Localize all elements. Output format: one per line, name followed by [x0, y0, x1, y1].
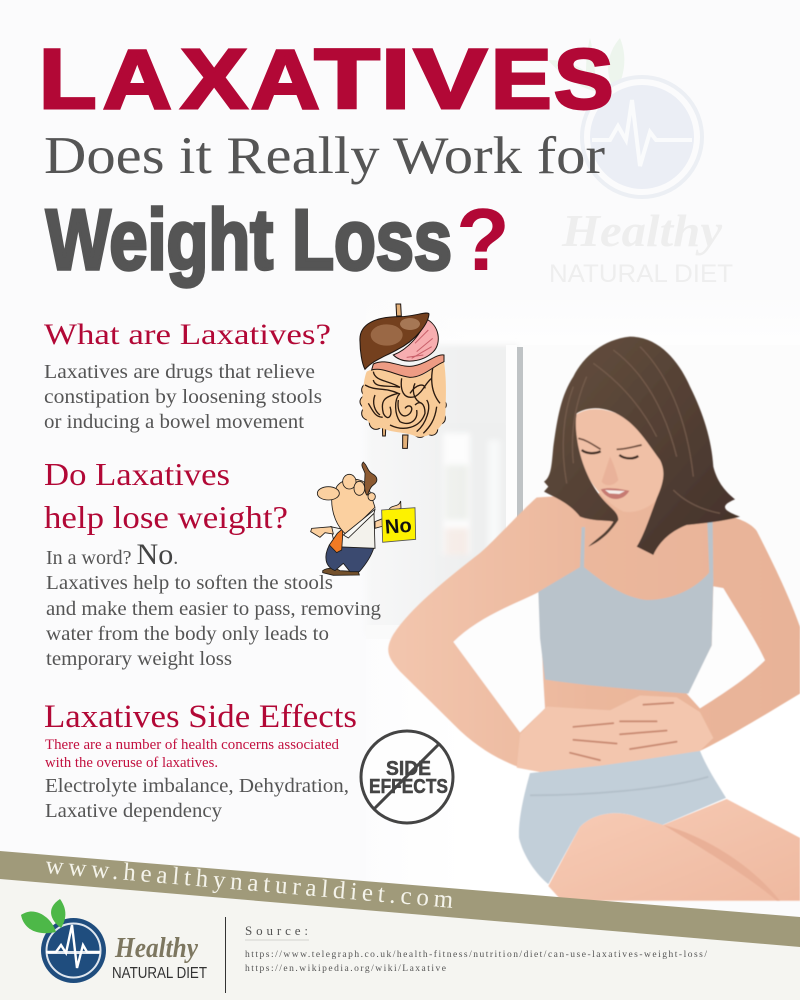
section: side effects: Laxatives Side Effects [44, 699, 357, 735]
section: do laxatives help: In a word? No. [46, 538, 178, 571]
icon: digestive system [360, 304, 446, 448]
face [573, 409, 668, 512]
section: what are laxatives: Laxatives are drugs that relieve [44, 361, 315, 383]
heading: question mark: ? [456, 190, 510, 289]
website url: www.healthynaturaldiet.com [44, 852, 455, 914]
footer logo [21, 899, 207, 983]
gap left of torso [453, 592, 545, 732]
thighs [548, 799, 800, 901]
title: Laxatives [39, 32, 613, 127]
title: Laxatives: V [414, 32, 487, 126]
source list: https://www.telegraph.co.uk/health-fitness/nutrition/diet/can-use-laxatives-weight-loss/ [245, 949, 707, 960]
section: do laxatives help: and make them easier to pass, removing [46, 598, 381, 620]
hands [517, 695, 713, 772]
skin: shoulders and arms [388, 486, 800, 771]
section: side effects: Electrolyte imbalance, Dehydration, [45, 775, 349, 797]
section: do laxatives help: temporary weight loss [46, 648, 232, 670]
footer background [0, 879, 800, 1000]
footer logo: Healthy [114, 932, 198, 964]
source list: Source: [245, 923, 308, 938]
icon: cartoon man with no sign: No [384, 515, 412, 539]
divider [224, 917, 226, 993]
icon: side effects crossed out: EFFECTS [369, 776, 448, 798]
shorts [519, 751, 726, 884]
icon: side effects crossed out [361, 731, 453, 823]
hair [544, 337, 740, 555]
source list: https://en.wikipedia.org/wiki/Laxative [245, 964, 446, 974]
icon: side effects crossed out: SIDE [386, 758, 431, 780]
title: Laxatives: L [39, 32, 96, 126]
band [0, 851, 800, 947]
section: what are laxatives: constipation by loosening stools [44, 386, 322, 408]
watermark logo: Healthy [561, 205, 723, 256]
section: do laxatives help: help lose weight? [44, 499, 288, 535]
section: do laxatives help: Do Laxatives [44, 456, 230, 492]
watermark logo: NATURAL DIET [549, 260, 733, 288]
source list [245, 923, 707, 974]
section: side effects: Laxative dependency [45, 800, 222, 822]
section: do laxatives help [44, 456, 381, 670]
section: what are laxatives: or inducing a bowel movement [44, 411, 304, 433]
heading: weight loss: Weight Loss [46, 193, 452, 288]
section: side effects: There are a number of health concerns associated [45, 737, 340, 753]
photo: woman holding her stomach [388, 337, 800, 901]
footer logo: NATURAL DIET [112, 965, 207, 982]
section: do laxatives help: Laxatives help to soften the stools [46, 572, 333, 594]
title: Laxatives: I [381, 33, 410, 127]
section: what are laxatives [44, 318, 331, 433]
title: Laxatives: E [491, 32, 552, 126]
title: Laxatives: A [251, 32, 320, 126]
title: Laxatives: A [103, 32, 172, 126]
photo: bedroom background [300, 286, 800, 906]
section: side effects: with the overuse of laxatives. [45, 755, 218, 771]
watermark logo [548, 38, 733, 288]
title: Laxatives: S [554, 33, 613, 126]
title: Laxatives: X [181, 33, 247, 126]
crop top [538, 527, 713, 694]
subtitle: does it really work: Does it Really Work for [44, 127, 605, 185]
section: what are laxatives: What are Laxatives? [44, 318, 331, 351]
section: do laxatives help: water from the body only leads to [46, 623, 329, 645]
title: Laxatives: T [314, 33, 380, 126]
icon: cartoon man with no sign [311, 462, 416, 575]
gap right of torso [687, 586, 765, 708]
section: side effects [44, 699, 357, 822]
